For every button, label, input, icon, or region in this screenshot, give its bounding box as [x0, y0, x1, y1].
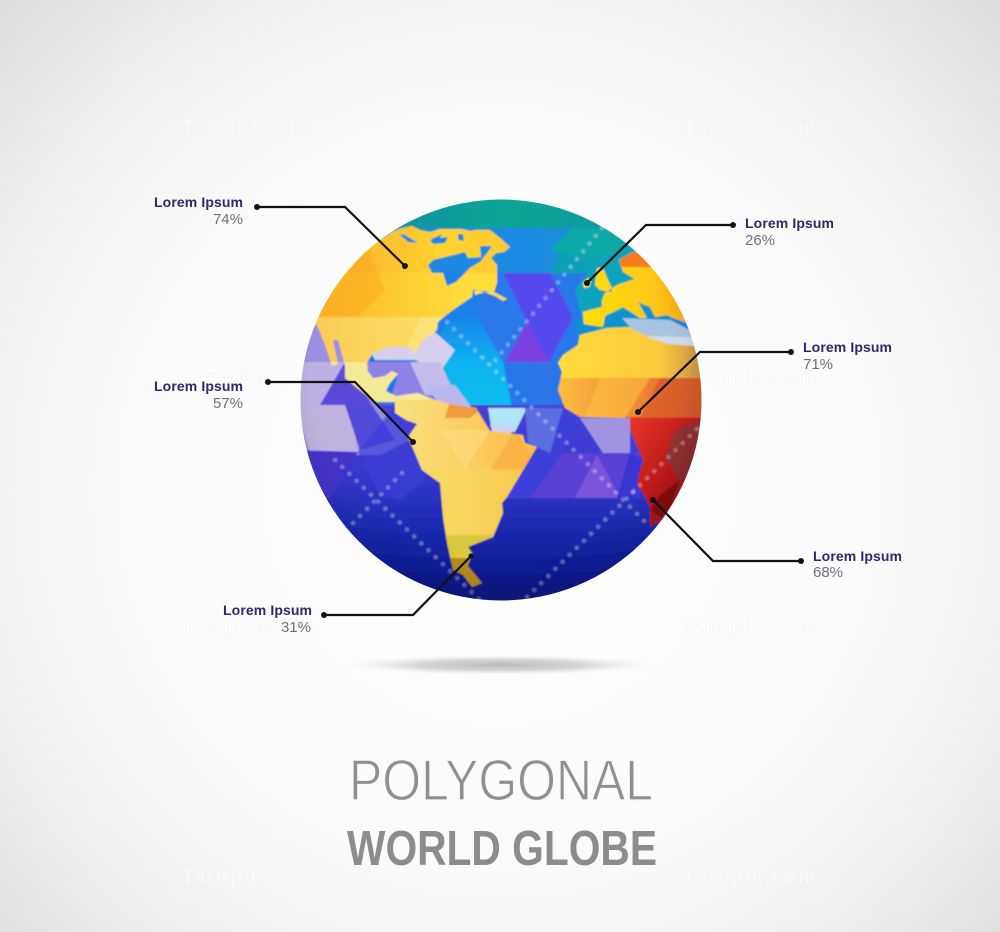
- callout: bottom right: [650, 497, 902, 581]
- callout: top right: [584, 215, 834, 286]
- continents: [315, 224, 702, 588]
- dots over africa: [632, 429, 697, 493]
- watermark text: Tarnpik.com: [182, 866, 316, 889]
- callout: top right: 26%: [745, 232, 775, 249]
- lilac ocean west: [302, 324, 409, 456]
- callout: bottom left: [223, 554, 474, 636]
- dotted route lines: [332, 226, 647, 600]
- callout: top left: 74%: [213, 211, 243, 228]
- caribbean: [372, 332, 456, 368]
- callout: bottom right: 68%: [813, 564, 843, 581]
- globe shadow: [345, 655, 655, 675]
- ocean: [295, 195, 710, 605]
- mediterranean pale band: [622, 318, 695, 346]
- callout: top left: Lorem Ipsum: [154, 194, 243, 210]
- globe edge shading: [303, 320, 702, 600]
- watermark text: Tarnpik.com: [182, 616, 316, 639]
- watermark text: Tarnpik.com: [683, 616, 817, 639]
- watermark text: [182, 116, 817, 889]
- land facets: [326, 250, 384, 316]
- watermark text: Tarnpik.com: [182, 366, 316, 389]
- polygonal globe: [290, 195, 710, 610]
- callout: middle left: 57%: [213, 395, 243, 412]
- callout: middle left: [154, 378, 416, 445]
- callout: middle right: Lorem Ipsum: [803, 339, 892, 355]
- atlantic cyan pale: [488, 408, 527, 432]
- callout: top right: Lorem Ipsum: [745, 215, 834, 231]
- mid south atlantic: [505, 408, 640, 498]
- watermark text: Tarnpik.com: [683, 366, 817, 389]
- callout: bottom left: Lorem Ipsum: [223, 602, 312, 618]
- watermark text: Tarnpik.com: [683, 116, 817, 139]
- title: polygonal: POLYGONAL: [349, 749, 653, 813]
- callout: top left: [154, 194, 408, 269]
- callout: middle right: [635, 339, 892, 415]
- watermark text: Tarnpik.com: [182, 116, 316, 139]
- title: world globe: WORLD GLOBE: [347, 821, 657, 876]
- callout: middle left: Lorem Ipsum: [154, 378, 243, 394]
- callout: bottom right: Lorem Ipsum: [813, 548, 902, 564]
- callout: middle right: 71%: [803, 356, 833, 373]
- watermark text: Tarnpik.com: [683, 866, 817, 889]
- callout: bottom left: 31%: [281, 619, 311, 636]
